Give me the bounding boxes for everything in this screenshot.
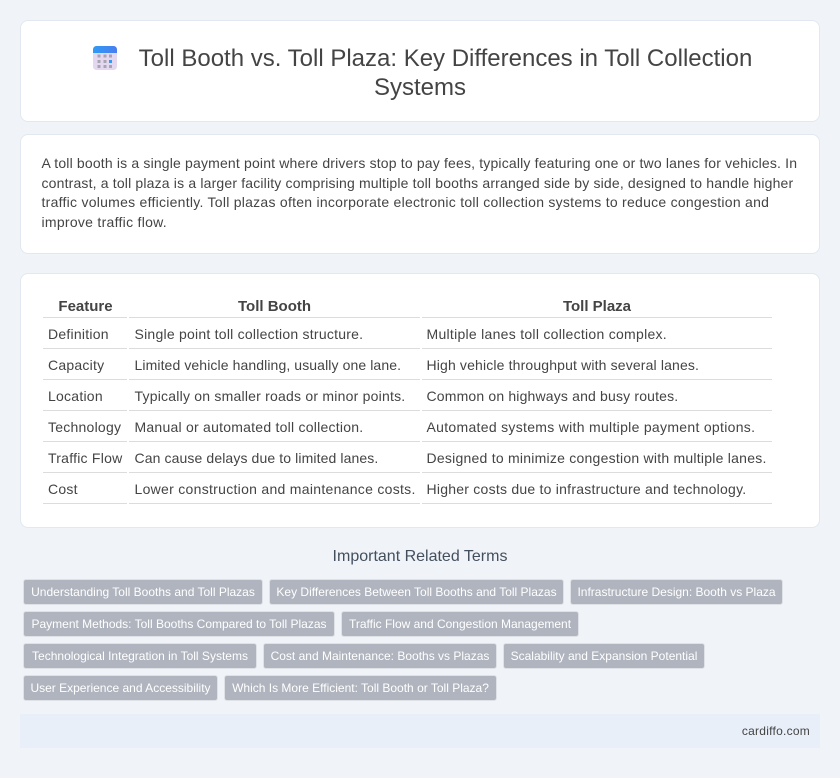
- row: Definition: Single point toll collection structure.: [134, 326, 363, 342]
- tag: Key Differences Between Toll Booths and Toll Plazas: [276, 585, 557, 599]
- tag: [269, 579, 564, 604]
- tag: Traffic Flow and Congestion Management: [349, 617, 571, 631]
- tag: [23, 611, 335, 636]
- row: Technology: Technology: [48, 419, 121, 435]
- panel: intro text: [20, 134, 820, 254]
- row: Cost: [48, 481, 746, 497]
- footer credit: cardiffo.com: [742, 724, 810, 738]
- related terms tags: [23, 579, 783, 701]
- title: [139, 45, 752, 101]
- tag: [503, 643, 705, 668]
- panel: header: [20, 20, 820, 122]
- intro paragraph: improve traffic flow.: [42, 214, 167, 230]
- tag: [23, 579, 263, 604]
- row: Technology: Manual or automated toll collection.: [134, 419, 363, 435]
- table header: [58, 298, 632, 315]
- table header: Toll Plaza: [563, 298, 631, 315]
- tag: [224, 675, 497, 700]
- row: Definition: [48, 326, 667, 342]
- row: Technology: Automated systems with multiple payment options.: [426, 419, 755, 435]
- tag: [23, 643, 257, 668]
- row: Location: [48, 388, 678, 404]
- tag: Scalability and Expansion Potential: [511, 649, 697, 663]
- tag: Payment Methods: Toll Booths Compared to Toll Plazas: [31, 617, 327, 631]
- row: Traffic Flow: Traffic Flow: [48, 450, 122, 466]
- panel: comparison table: [20, 273, 820, 528]
- row: Capacity: Capacity: [48, 357, 104, 373]
- row: Cost: Cost: [48, 481, 78, 497]
- tag: Technological Integration in Toll Systems: [32, 649, 248, 663]
- title: Systems: [374, 74, 466, 101]
- intro paragraph: contrast, a toll plaza is a larger facility comprising multiple toll booths arranged side by side, designed to handle higher: [42, 175, 793, 191]
- tag: [263, 643, 497, 668]
- comparison table: [43, 298, 772, 504]
- tag: [23, 675, 218, 700]
- intro paragraph: traffic volumes efficiently. Toll plazas often incorporate electronic toll collection systems to reduce congestion and: [42, 194, 769, 210]
- table header: Toll Booth: [238, 298, 311, 315]
- tag: Which Is More Efficient: Toll Booth or Toll Plaza?: [232, 681, 489, 695]
- intro paragraph: A toll booth is a single payment point where drivers stop to pay fees, typically featuring one or two lanes for vehicles. In: [42, 155, 797, 171]
- tag: [341, 611, 579, 636]
- tag: Cost and Maintenance: Booths vs Plazas: [271, 649, 489, 663]
- row: Definition: Definition: [48, 326, 109, 342]
- row: Location: Typically on smaller roads or minor points.: [134, 388, 405, 404]
- tag: [570, 579, 783, 604]
- row: Cost: Lower construction and maintenance costs.: [134, 481, 416, 497]
- icon: calendar: [93, 46, 117, 70]
- table header: Feature: [58, 298, 113, 315]
- intro paragraph: [42, 155, 797, 230]
- row: Technology: [48, 419, 755, 435]
- row: Definition: Multiple lanes toll collection complex.: [426, 326, 667, 342]
- tag: User Experience and Accessibility: [30, 681, 211, 695]
- row: Location: Common on highways and busy routes.: [426, 388, 678, 404]
- tag: Understanding Toll Booths and Toll Plazas: [31, 585, 255, 599]
- row: Traffic Flow: Designed to minimize congestion with multiple lanes.: [426, 450, 767, 466]
- related terms heading: Important Related Terms: [333, 548, 507, 565]
- title: Toll Booth vs. Toll Plaza: Key Differences in Toll Collection: [139, 45, 752, 72]
- row: Capacity: Limited vehicle handling, usually one lane.: [134, 357, 401, 373]
- footer bar: [20, 714, 820, 748]
- row: Traffic Flow: [48, 450, 767, 466]
- row: Cost: Higher costs due to infrastructure and technology.: [426, 481, 746, 497]
- row: Capacity: High vehicle throughput with several lanes.: [426, 357, 699, 373]
- row: Traffic Flow: Can cause delays due to limited lanes.: [134, 450, 378, 466]
- row: Location: Location: [48, 388, 103, 404]
- row: Capacity: [48, 357, 699, 373]
- tag: Infrastructure Design: Booth vs Plaza: [577, 585, 776, 599]
